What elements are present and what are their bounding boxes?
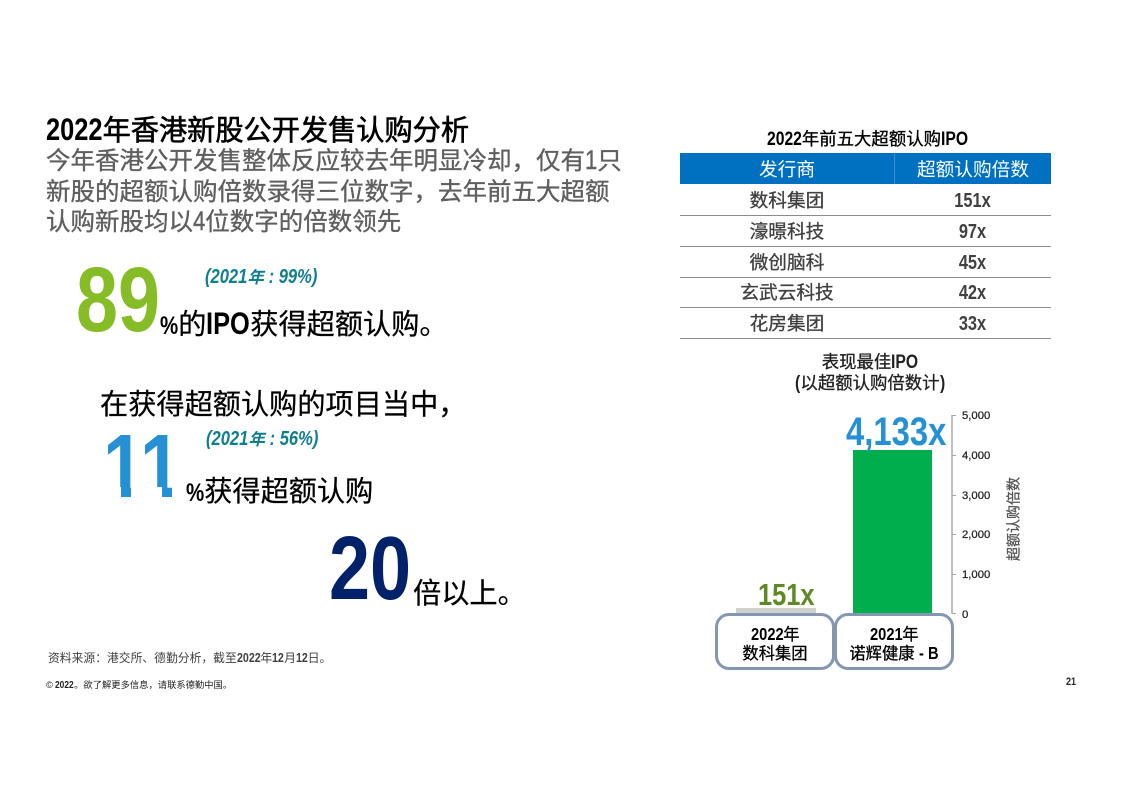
row 4: 玄武云科技: [740, 282, 834, 303]
chart title: 表现最佳: [822, 352, 891, 372]
y axis title: 超额认购倍数: [1006, 477, 1022, 561]
lead-in text: 在获得超额认购的项目当中，: [100, 388, 466, 420]
stat caption: 获得超额认购: [204, 474, 373, 506]
comparison note 2021: 年: [247, 269, 264, 287]
table header: 超额认购倍数: [917, 159, 1029, 180]
row 2: 97x: [959, 221, 986, 243]
subtitle text block: [46, 145, 622, 236]
source note: 12: [272, 650, 284, 665]
value label 151x: 151x: [758, 577, 815, 612]
stat: 89% oversubscribed: [76, 249, 448, 351]
y axis ticks and labels: 3,000: [962, 490, 990, 502]
bar chart: best performing IPO: [715, 410, 1022, 670]
stat caption: 倍以上。: [413, 576, 526, 608]
category box 2021: - B: [919, 642, 939, 662]
big number 20: 20: [329, 519, 411, 619]
row 5: 33x: [959, 313, 986, 335]
table header: [680, 153, 1051, 184]
bar 2022: [736, 608, 816, 614]
stat caption: %: [186, 478, 204, 506]
copyright footer: 2022: [55, 680, 74, 691]
row 1: 数科集团: [750, 190, 824, 211]
stat caption: 的 获得超额认购。: [178, 308, 448, 340]
title: 2022: [46, 112, 103, 147]
comparison note 2021: : 56%): [269, 428, 318, 450]
source note: 资料来源：港交所、德勤分析，截至 年 月 日。: [48, 651, 331, 665]
chart title: [795, 352, 945, 394]
row 3: [680, 247, 1051, 278]
source note: 12: [296, 650, 308, 665]
big number 89: 89: [76, 249, 160, 351]
page number: 21: [1066, 676, 1076, 688]
comparison note 2021: 年: [248, 431, 265, 449]
table: top five oversubscribed IPOs: [680, 153, 1051, 339]
big number 11: 11: [103, 417, 181, 517]
table header: 发行商: [759, 159, 815, 180]
source note: 2022: [237, 650, 260, 665]
category box 2021: 诺辉健康: [849, 644, 915, 662]
row 3: 微创脑科: [750, 252, 824, 273]
comparison note 2021: [206, 428, 318, 450]
row 1: 151x: [954, 190, 991, 212]
stat caption: IPO: [206, 306, 250, 340]
stat: 20 times: [329, 519, 526, 619]
y axis ticks and labels: [952, 410, 990, 621]
comparison note 2021: (2021: [205, 266, 247, 288]
category box 2022: 2022: [750, 624, 783, 644]
chart title: ): [940, 373, 945, 394]
value label 4,133x: 4,133x: [846, 410, 946, 454]
row 2: 濠暻科技: [750, 221, 824, 242]
comparison note 2021: (2021: [206, 428, 248, 450]
chart title: 以超额认购倍数计: [800, 373, 940, 393]
comparison note 2021: [205, 266, 317, 288]
stat caption: %: [160, 312, 178, 340]
y axis line: [951, 415, 952, 614]
table title: 年前五大超额认购: [802, 129, 941, 149]
row 3: 45x: [959, 252, 986, 274]
subtitle text block: 1: [585, 145, 597, 175]
chart title: (: [795, 373, 800, 394]
subtitle text block: 新股的超额认购倍数录得三位数字，去年前五大超额: [46, 178, 610, 206]
category box 2021: [834, 613, 954, 670]
row 1: [680, 185, 1051, 216]
y axis ticks and labels: 4,000: [962, 450, 990, 462]
title: 年香港新股公开发售认购分析: [103, 114, 469, 146]
row 5: 花房集团: [750, 313, 824, 334]
category box 2021: 2021: [870, 624, 902, 644]
row 2: [680, 216, 1051, 247]
category box 2021: 年: [902, 626, 918, 644]
stat: 11% oversubscribed: [103, 417, 373, 517]
y axis ticks and labels: 2,000: [962, 529, 990, 541]
table title: [767, 129, 968, 150]
subtitle text block: 4: [193, 206, 205, 236]
table title: 2022: [767, 129, 802, 150]
y axis ticks and labels: 5,000: [962, 410, 990, 422]
y axis ticks and labels: 0: [962, 609, 968, 621]
comparison note 2021: : 99%): [268, 266, 317, 288]
category box 2022: [715, 613, 835, 670]
copyright footer: © 。欲了解更多信息，请联系德勤中国。: [46, 680, 232, 690]
category box 2022: 数科集团: [742, 644, 808, 662]
y axis ticks and labels: 1,000: [962, 569, 990, 581]
row 4: 42x: [959, 282, 986, 304]
bar 2021: [853, 450, 932, 614]
row 4: [680, 277, 1051, 308]
row 5: [680, 308, 1051, 339]
chart title: IPO: [891, 352, 918, 373]
category box 2022: 年: [783, 626, 800, 644]
subtitle text block: 今年香港公开发售整体反应较去年明显冷却，仅有 只: [46, 148, 622, 175]
table title: IPO: [941, 129, 968, 150]
subtitle text block: 认购新股均以 位数字的倍数领先: [46, 208, 401, 236]
